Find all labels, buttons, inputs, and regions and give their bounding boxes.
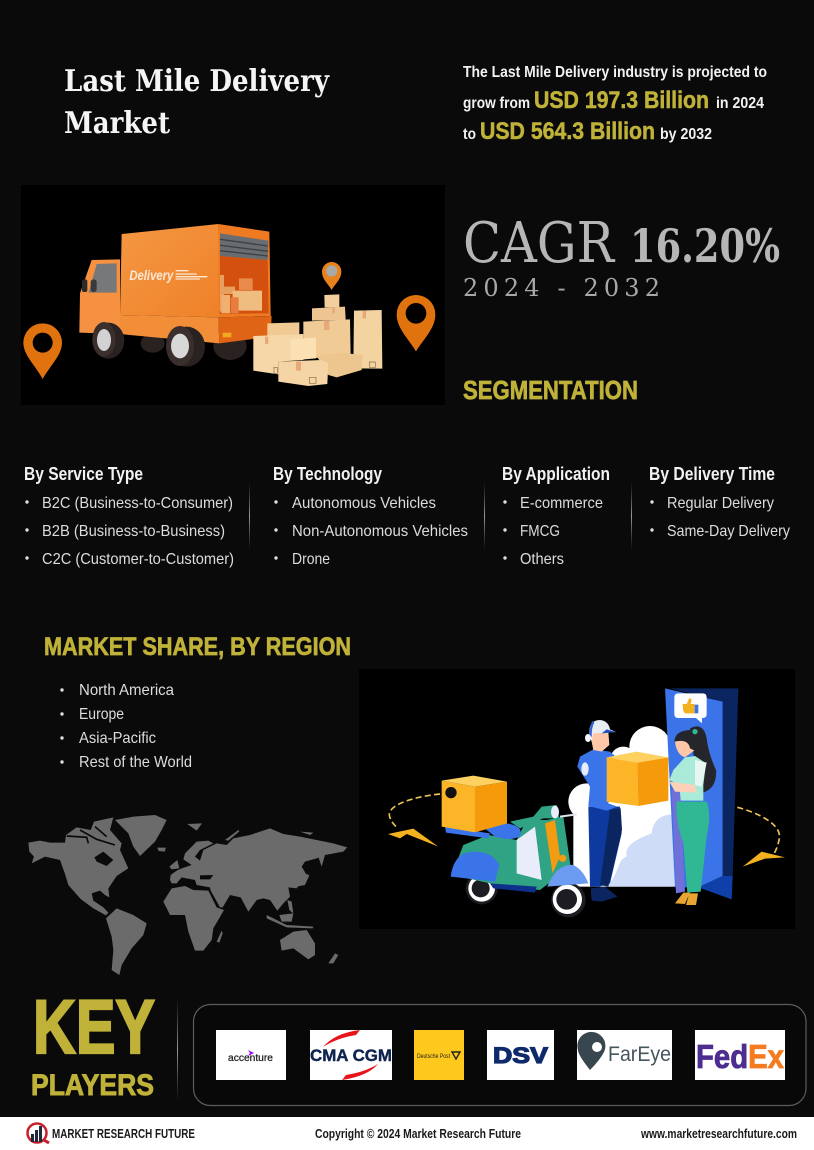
column: by technology: Non-Autonomous Vehicles <box>292 523 468 540</box>
column: by delivery time: Regular Delivery <box>667 495 774 512</box>
column: by technology <box>273 464 468 568</box>
column: by technology: Autonomous Vehicles <box>292 495 436 512</box>
footer copyright: Copyright © 2024 Market Research Future <box>315 1127 521 1141</box>
CAGR figure: 16.20% <box>630 219 780 273</box>
column: by application: FMCG <box>520 523 560 540</box>
region list: Europe <box>79 706 124 723</box>
logo: CMA CGM <box>310 1030 392 1080</box>
region list <box>60 682 192 771</box>
column: by service type: B2B (Business-to-Business) <box>42 523 225 540</box>
column: by delivery time: Same-Day Delivery <box>667 523 790 540</box>
CAGR figure <box>463 211 780 276</box>
market projection text: grow from <box>463 95 530 112</box>
cloud <box>568 726 675 887</box>
segmentation heading: SEGMENTATION <box>463 375 638 405</box>
delivery illustration panel <box>359 669 795 929</box>
CAGR years: 2024 - 2032 <box>463 274 660 302</box>
key players heading: KEY <box>33 985 155 1070</box>
market projection text: The Last Mile Delivery industry is projected to <box>463 64 767 81</box>
logo: DSV <box>487 1030 554 1080</box>
column: by application <box>502 464 610 568</box>
key players heading: PLAYERS <box>31 1069 154 1102</box>
region list: Asia-Pacific <box>79 730 156 747</box>
icon: stacked parcels <box>253 294 382 386</box>
market projection text: USD 564.3 Billion <box>480 118 655 145</box>
column: by delivery time: By Delivery Time <box>649 464 775 484</box>
logo: CMA CGM: CMA CGM <box>310 1046 392 1065</box>
woman <box>669 726 716 905</box>
column: by service type: B2C (Business-to-Consumer) <box>42 495 233 512</box>
region list: Rest of the World <box>79 754 192 771</box>
icon: blue door <box>665 688 738 899</box>
CAGR figure: CAGR <box>463 211 616 276</box>
icon: paper plane right <box>743 852 785 867</box>
icon: left map pin <box>23 323 62 379</box>
market projection text: by 2032 <box>660 126 712 143</box>
column: by technology: By Technology <box>273 464 382 484</box>
logo: FedEx: FedEx <box>696 1038 785 1075</box>
logo: FarEye <box>577 1030 672 1080</box>
logo: accenture: accenture <box>228 1053 273 1064</box>
icon: dashed route right <box>737 807 780 854</box>
title: Last Mile Delivery <box>64 64 330 99</box>
market projection text <box>463 64 767 145</box>
market share heading: MARKET SHARE, BY REGION <box>44 633 351 661</box>
delivery man <box>577 720 622 902</box>
column: by application: E-commerce <box>520 495 603 512</box>
column: by application: Others <box>520 551 564 568</box>
footer bar <box>0 1117 814 1150</box>
title: Market <box>64 106 170 141</box>
icon: paper plane left <box>388 829 438 847</box>
market projection text: in 2024 <box>716 95 764 112</box>
icon: delivery truck <box>79 224 272 367</box>
region list: North America <box>79 682 174 699</box>
icon: scooter parcel <box>442 776 507 838</box>
logo: DSV: DSV <box>493 1043 548 1068</box>
footer brand: MARKET RESEARCH FUTURE <box>52 1127 195 1141</box>
market projection text: USD 197.3 Billion <box>534 87 709 114</box>
truck image panel <box>21 185 445 405</box>
logo: accenture <box>216 1030 286 1080</box>
market projection text: to <box>463 126 476 143</box>
column: by delivery time <box>649 464 790 540</box>
icon: small map pin <box>322 262 341 290</box>
icon: dashed route left <box>389 794 440 827</box>
logo: Deutsche Post: Deutsche Post <box>417 1053 450 1060</box>
key players panel <box>194 1004 806 1106</box>
column: by application: By Application <box>502 464 610 484</box>
icon: thumbs up bubble <box>674 693 707 723</box>
icon: scooter <box>451 805 588 917</box>
column: by service type: By Service Type <box>24 464 143 484</box>
icon: market research future logo <box>28 1124 49 1143</box>
title <box>64 64 330 141</box>
column: by service type: C2C (Customer-to-Customer) <box>42 551 234 568</box>
icon: delivery truck: Delivery <box>129 267 174 283</box>
icon: right map pin <box>397 295 435 351</box>
column: by technology: Drone <box>292 551 330 568</box>
logo: FarEye: FarEye <box>608 1043 671 1066</box>
column: by service type <box>24 464 234 568</box>
key players heading <box>31 985 155 1102</box>
icon: carried parcel <box>607 752 668 806</box>
world map <box>28 815 347 975</box>
logo: Deutsche Post <box>414 1030 464 1080</box>
